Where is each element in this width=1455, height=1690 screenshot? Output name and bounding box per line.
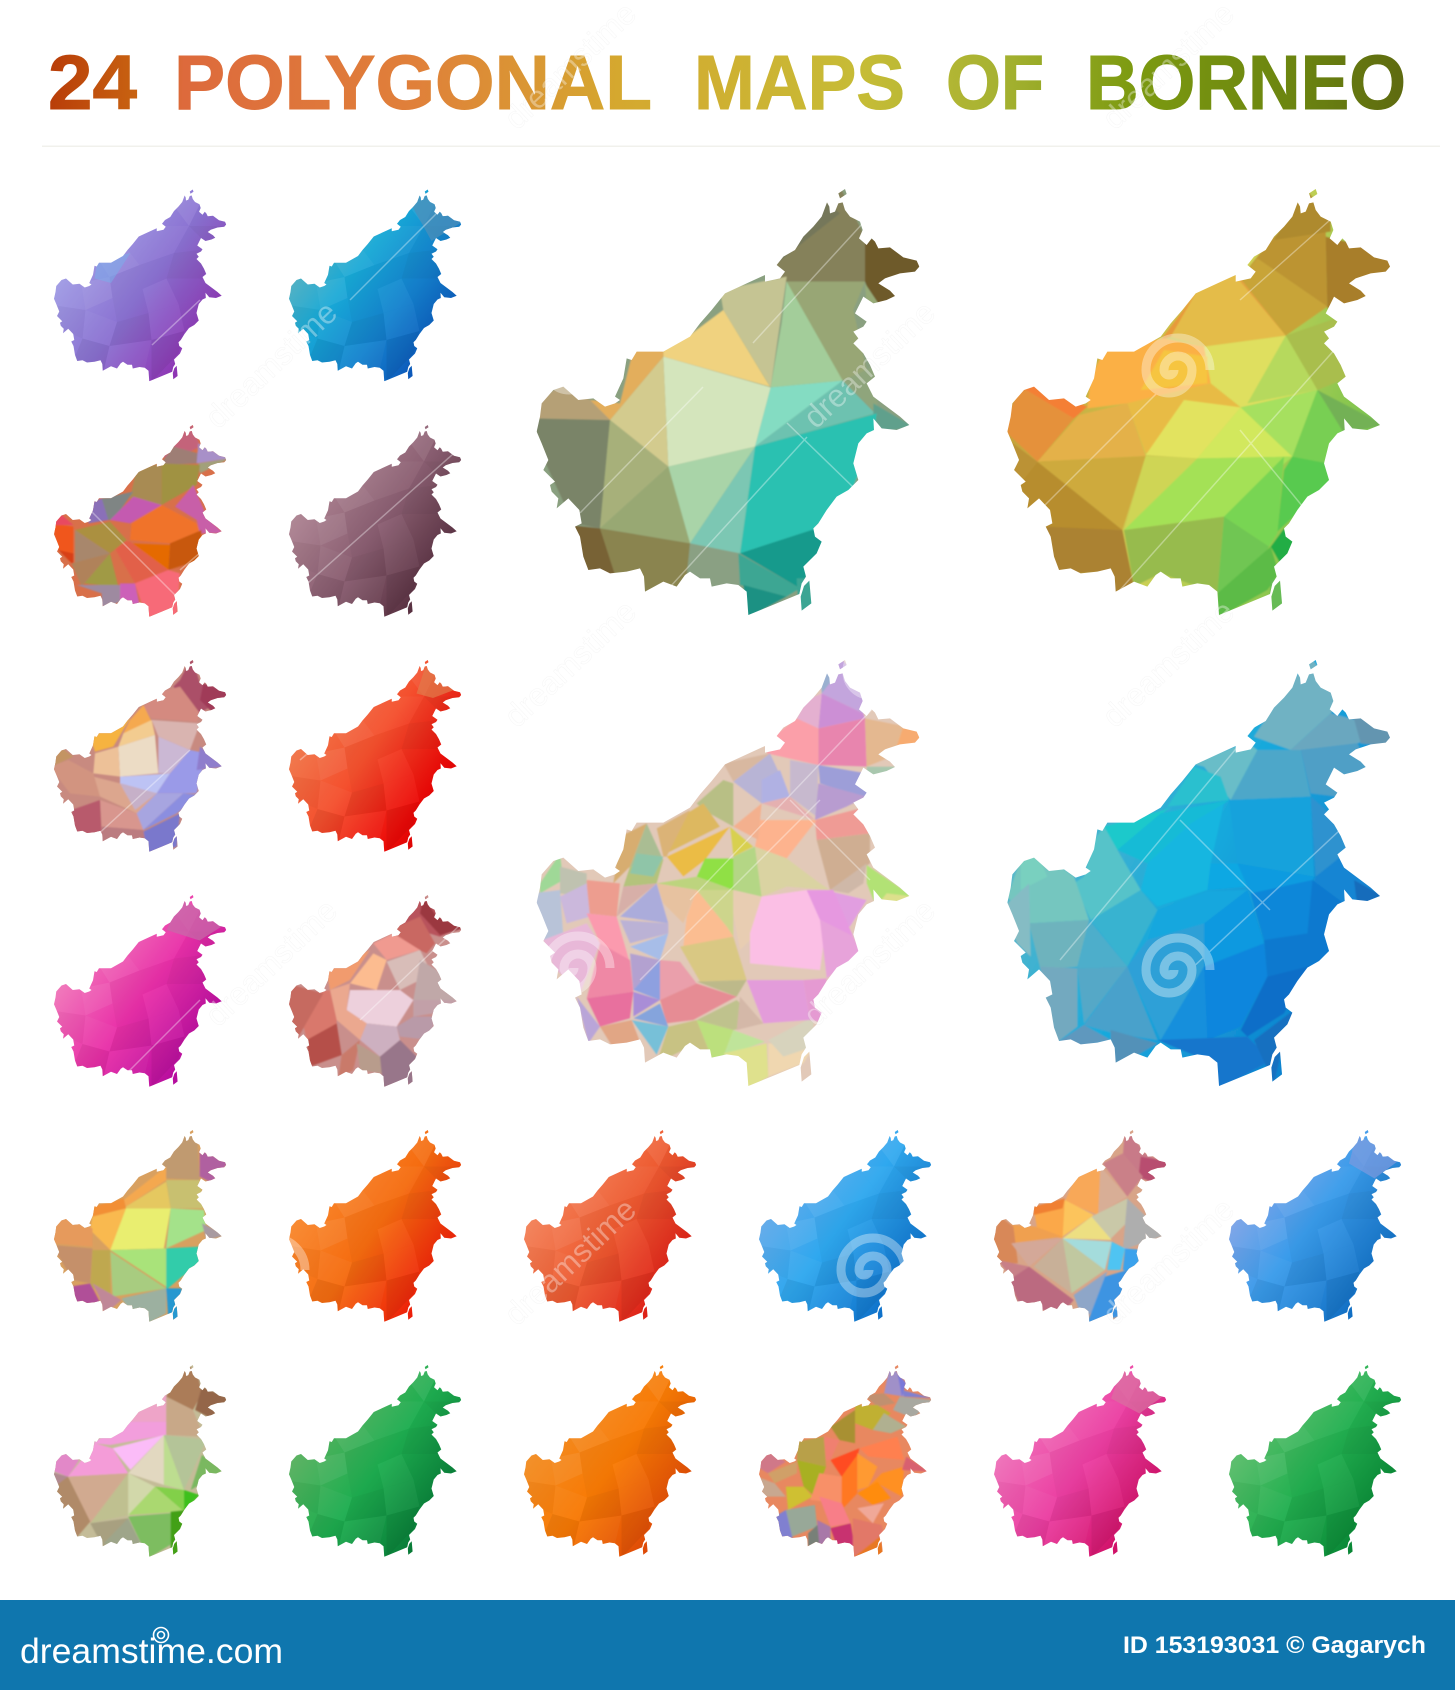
watermark overlay: dreamstime — [198, 892, 344, 1033]
watermark overlay: dreamstime — [1095, 1191, 1241, 1332]
small map: orange red — [289, 1130, 462, 1322]
large map: pastel mosaic — [536, 660, 920, 1086]
small map: amber — [524, 1365, 696, 1557]
small map: magenta — [54, 895, 226, 1087]
small map: sky blue — [759, 1130, 932, 1322]
small map: violet — [54, 190, 226, 382]
large map: earth teal — [536, 189, 920, 615]
small map: rainbow meadow — [54, 1130, 226, 1322]
footer bar — [0, 1600, 1455, 1690]
small map: sunrise lilac — [54, 660, 226, 852]
footer logo spiral icon — [154, 1628, 168, 1642]
title: 24 — [48, 40, 137, 126]
small map: multicolour orange — [54, 425, 226, 617]
small map: red — [289, 660, 462, 852]
small map: rose pearl — [289, 895, 462, 1087]
watermark overlay: dreamstime — [198, 294, 344, 435]
large map: autumn green — [1008, 189, 1390, 615]
watermark overlay — [70, 0, 1370, 1332]
watermark overlay: dreamstime — [796, 892, 942, 1033]
watermark overlay: dreamstime — [796, 294, 942, 435]
title: POLYGONAL — [174, 40, 652, 126]
large map: ocean blue — [1008, 660, 1390, 1086]
title: OF — [946, 40, 1044, 126]
title — [48, 40, 1406, 126]
small map: pink and green — [54, 1365, 226, 1557]
small map: coral red — [524, 1130, 696, 1322]
title: MAPS — [694, 40, 905, 126]
watermark overlay: dreamstime — [497, 593, 643, 734]
small map: periwinkle blue — [1229, 1130, 1402, 1322]
image id and credit: ID 153193031 © Gagarych — [1123, 1632, 1426, 1659]
small map: emerald — [289, 1365, 462, 1557]
small map: deep blue — [289, 190, 462, 382]
watermark overlay: dreamstime — [1095, 593, 1241, 734]
small map: forest green — [1229, 1365, 1402, 1557]
small map: dark mauve — [289, 425, 462, 617]
small map: sorbet mix — [994, 1130, 1166, 1322]
footer logo text: dreamstime.com — [20, 1632, 283, 1671]
title: BORNEO — [1086, 40, 1406, 126]
small map: hot pink — [994, 1365, 1166, 1557]
watermark overlay: dreamstime — [497, 1191, 643, 1332]
small map: festival mosaic — [759, 1365, 932, 1557]
